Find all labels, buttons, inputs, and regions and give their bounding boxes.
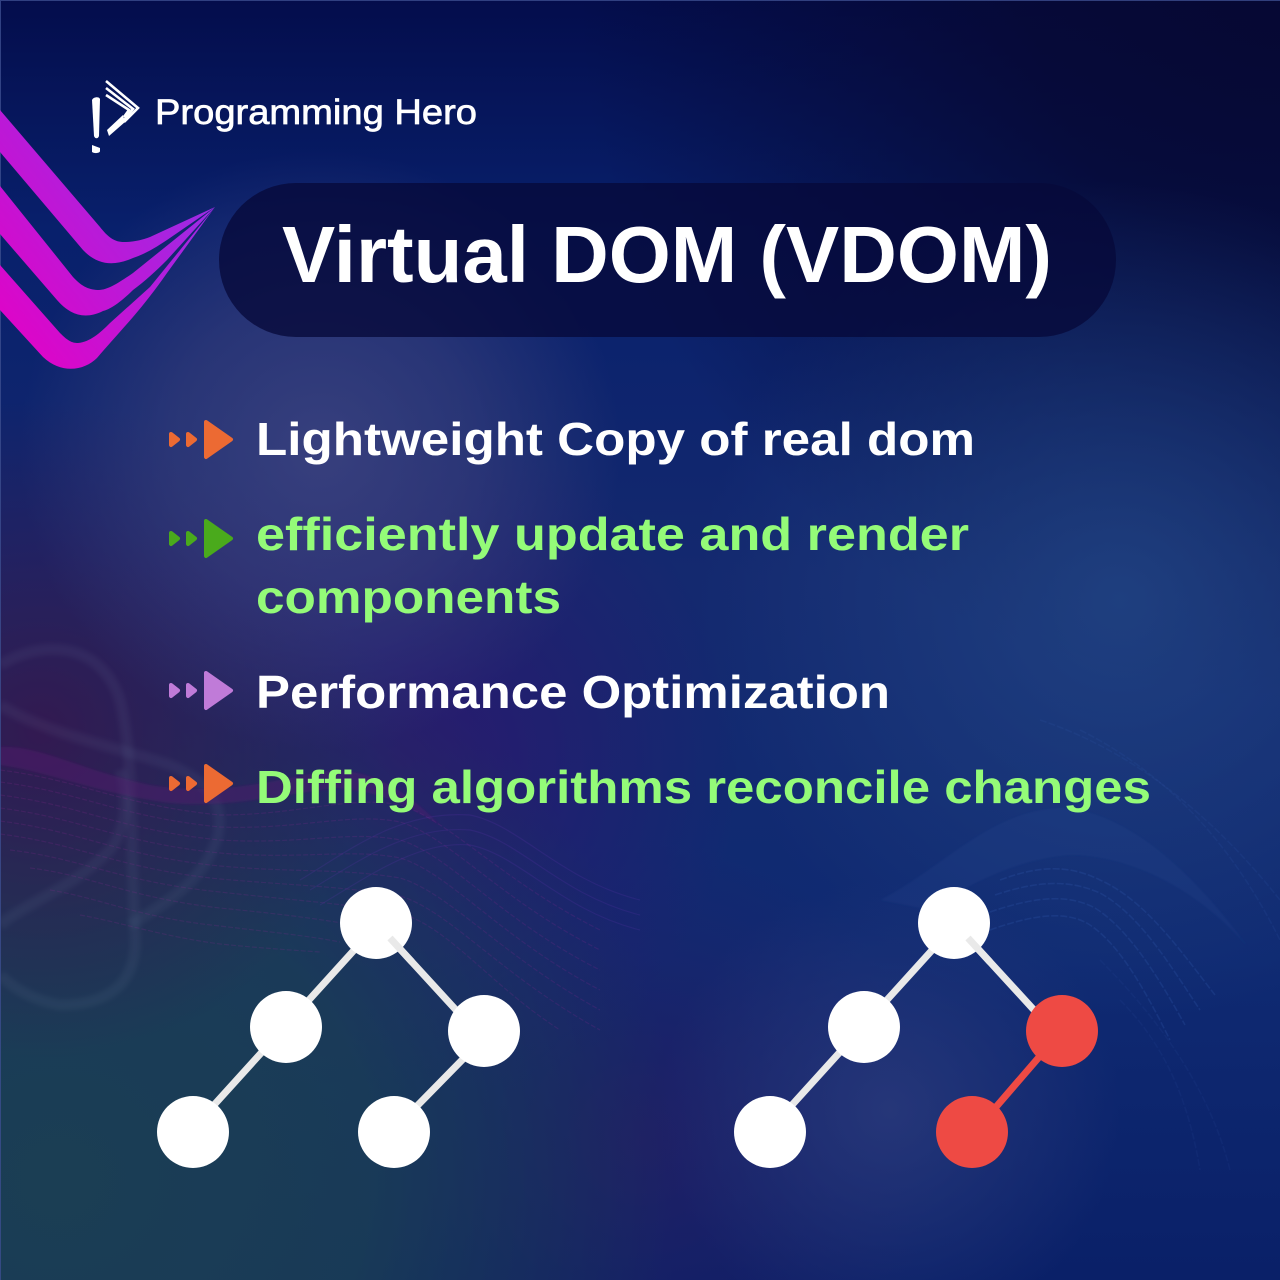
logo icon <box>92 81 138 153</box>
text: Lightweight Copy of real dom <box>256 413 975 465</box>
text: Diffing algorithms reconcile changes <box>256 761 1151 813</box>
icon: orange arrows <box>171 422 231 457</box>
logo <box>92 81 477 153</box>
title pill <box>219 183 1116 337</box>
icon: orange arrows <box>171 766 231 801</box>
tree: virtual DOM with changed nodes <box>734 887 1098 1168</box>
chevron ribbons <box>0 110 215 369</box>
icon: green arrows <box>171 521 231 556</box>
bullet 4 <box>171 761 1151 813</box>
react atom watermark <box>0 649 219 1005</box>
tree: real DOM <box>157 887 520 1168</box>
text: Performance Optimization <box>256 666 890 718</box>
icon: violet arrows <box>171 673 231 708</box>
text: efficiently update and render <box>256 508 969 560</box>
bullet 2 <box>171 508 969 623</box>
purple wave left <box>0 747 640 1030</box>
bullet 1 <box>171 413 975 465</box>
text: components <box>256 571 561 623</box>
title: Virtual DOM (VDOM) <box>282 210 1052 299</box>
bullet 3 <box>171 666 890 718</box>
wave right <box>880 720 1280 1170</box>
logo wordmark: Programming Hero <box>155 92 477 132</box>
